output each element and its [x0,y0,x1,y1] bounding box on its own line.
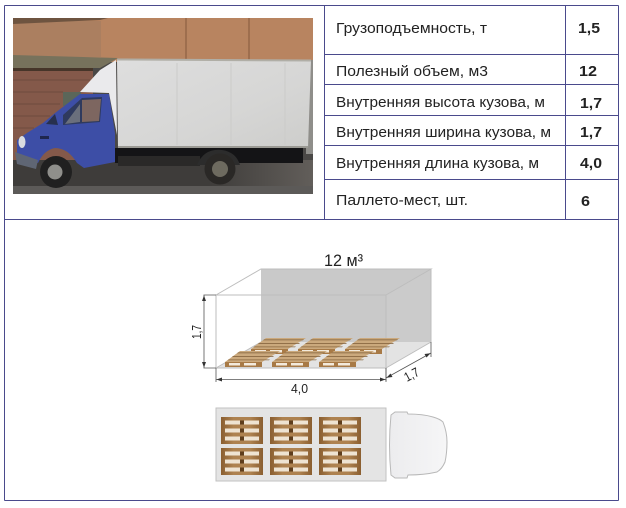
row: pallets: 6 [581,193,590,210]
row: length: Внутренняя длина кузова, м [336,155,539,172]
cab [390,412,447,478]
floor [216,342,431,368]
photo: truck [13,18,313,194]
row: volume: 12 [579,63,597,80]
height label: 1,7 [190,325,204,339]
rear wheel [197,150,240,165]
right wall [386,269,431,368]
width dimension [386,342,431,381]
back wall [261,269,431,342]
row: pallets [336,192,590,210]
row: width: Внутренняя ширина кузова, м [336,124,551,141]
cargo box [117,59,311,148]
row: length: 4,0 [580,155,602,172]
row: payload: Грузоподъемность, т [336,20,487,37]
awning [13,55,118,68]
top-view diagram [216,408,447,481]
row: height: 1,7 [580,95,602,112]
road [13,160,313,186]
fairing [80,60,117,135]
wall background [79,18,313,62]
height dimension [202,295,216,368]
cargo floor [216,408,386,481]
row: width: 1,7 [580,124,602,141]
row: pallets: Паллето-мест, шт. [336,192,468,209]
length label: 4,0 [291,381,308,396]
row: volume: Полезный объем, м3 [336,63,488,80]
box outline [216,269,431,368]
pallets top view [221,417,361,475]
specs table [336,20,602,210]
row: payload [336,20,600,37]
title: 12 m3: 12 м³ [324,252,363,270]
length dimension [216,368,386,382]
brick wall [13,68,93,160]
row: height: Внутренняя высота кузова, м [336,94,545,111]
3D cargo diagram [190,252,431,396]
front wheel [40,156,72,188]
row: volume [336,63,597,80]
row: payload: 1,5 [578,20,600,37]
pallets isometric [225,338,400,367]
cab [17,94,115,168]
width label: 1,7 [401,364,422,385]
chassis [115,148,303,163]
